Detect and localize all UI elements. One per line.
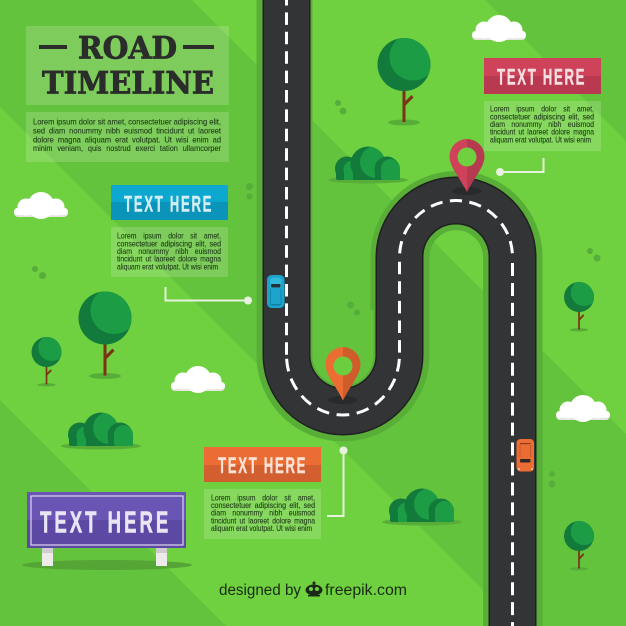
orange map pin — [326, 347, 360, 404]
orange text block: aliquam erat volutpat. Ut wisi enim — [211, 524, 312, 533]
title: ROAD: ROAD — [78, 30, 177, 66]
title: TIMELINE: TIMELINE — [42, 66, 214, 102]
orange text block: Lorem ipsum dolor sit amet, — [211, 494, 315, 502]
red text block: Lorem ipsum dolor sit amet, — [490, 104, 594, 114]
cloud right — [556, 395, 610, 422]
blue connector — [166, 287, 252, 304]
blue label: TEXT HERE — [124, 192, 213, 216]
purple road sign — [22, 492, 192, 570]
red label: TEXT HERE — [497, 65, 586, 89]
orange text block: tincidunt ut laoreet dolore magna — [211, 516, 316, 526]
icon: freepik logo — [306, 582, 322, 596]
orange label — [204, 447, 321, 482]
blue car — [267, 275, 284, 308]
intro text block: minim veniam, quis nostrud exerci tation ullamcorper — [33, 144, 221, 153]
orange text block — [204, 489, 321, 539]
intro text block: dolore magna aliquam erat volutpat. Ut wisi enim ad — [33, 136, 221, 144]
orange connector — [327, 446, 348, 516]
bush left — [61, 412, 141, 450]
orange label: TEXT HERE — [218, 454, 307, 478]
orange car — [516, 439, 534, 472]
title: left dash — [39, 45, 67, 49]
footer credit: designed by — [219, 582, 301, 599]
cloud centre — [171, 366, 225, 393]
blue label — [111, 185, 228, 220]
title panel — [26, 26, 229, 105]
red text block: aliquam erat volutpat. Ut wisi enim — [490, 136, 591, 144]
tree left small — [32, 334, 65, 387]
blue text block: aliquam erat volutpat. Ut wisi enim — [117, 262, 218, 272]
blue text block: tincidunt ut laoreet dolore magna — [117, 254, 222, 264]
ground dots — [32, 100, 600, 488]
purple road sign: TEXT HERE — [40, 506, 171, 540]
red text block: tincidunt ut laoreet dolore magna — [490, 128, 595, 136]
blue text block — [111, 227, 228, 277]
blue text block: diam nonummy nibh euismod — [117, 247, 221, 256]
intro text block — [26, 112, 229, 162]
intro text block: Lorem ipsum dolor sit amet, consectetuer adipiscing elit, — [33, 118, 221, 126]
blue text block: Lorem ipsum dolor sit amet, — [117, 232, 221, 240]
tree left large — [78, 287, 138, 379]
tree right lower — [564, 518, 597, 571]
orange text block: diam nonummy nibh euismod — [211, 508, 315, 518]
red text block — [484, 101, 601, 151]
winding road — [260, 0, 540, 626]
red connector — [496, 158, 544, 176]
red map pin — [450, 139, 484, 195]
tree top centre — [378, 34, 436, 126]
bush top — [328, 146, 408, 184]
intro text block: sed diam nonummy nibh euismod tincidunt ut laoreet — [33, 126, 222, 136]
cloud left — [14, 192, 68, 219]
title: right dash — [183, 45, 214, 49]
red text block: diam nonummy nibh euismod — [490, 120, 594, 129]
bush right — [382, 488, 462, 526]
red label — [484, 58, 601, 94]
orange text block: consectetuer adipiscing elit, sed — [211, 501, 315, 510]
footer credit: freepik.com — [325, 582, 407, 599]
footer credit — [219, 582, 407, 599]
blue text block: consectetuer adipiscing elit, sed — [117, 240, 221, 248]
cloud top — [472, 15, 526, 42]
tree right upper — [564, 279, 597, 332]
red text block: consectetuer adipiscing elit, sed — [490, 112, 594, 122]
